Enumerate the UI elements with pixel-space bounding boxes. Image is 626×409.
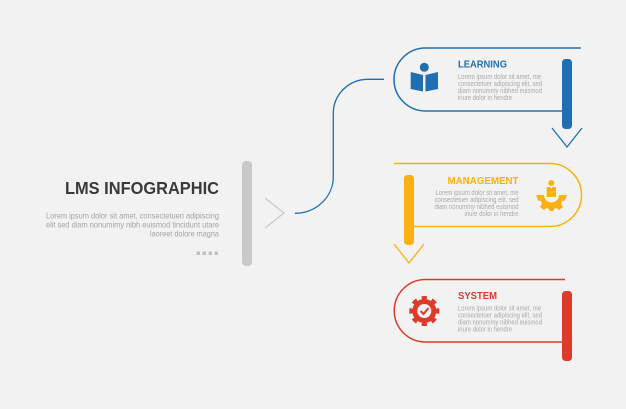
panel: intro (46, 178, 219, 255)
title: LMS INFOGRAPHIC (65, 178, 219, 198)
body text: diam nonummy nibhed euismod (434, 202, 518, 211)
icon: reader with book (411, 63, 438, 92)
body text: iriure dolor in hendre (458, 93, 512, 102)
intro text: elit sed diam nonumimy nibh euismod tincidunt utare (46, 220, 219, 230)
connector line (295, 79, 384, 213)
body text: iriure dolor in hendre (464, 209, 518, 218)
heading: LEARNING (458, 58, 507, 70)
arrow: down chevron (552, 128, 582, 147)
body text: Lorem ipsum dolor sit amet, me (436, 188, 518, 197)
pagination dots (196, 252, 218, 255)
heading: MANAGEMENT (448, 175, 519, 187)
grey vertical bar (242, 161, 252, 266)
body text (434, 188, 518, 218)
vertical bar (562, 291, 572, 361)
body text: Lorem ipsum dolor sit amet, me (458, 304, 541, 312)
body text (458, 72, 542, 102)
panel: learning (394, 48, 582, 147)
body text: diam nonummy nibhed euismod (458, 86, 542, 95)
arrow: grey chevron (265, 198, 284, 228)
intro text: laoreet dolore magna (150, 230, 219, 238)
intro text (46, 212, 219, 238)
arrow: down chevron (394, 244, 424, 263)
body text: consectetuer adipiscing elit, sed (458, 79, 542, 88)
icon: person on gear (536, 180, 567, 211)
body text: diam nonummy nibhed euismod (458, 318, 542, 326)
vertical bar (404, 175, 414, 245)
body text: consectetuer adipiscing elit, sed (458, 310, 542, 320)
heading: SYSTEM (458, 290, 497, 302)
card outline (394, 280, 565, 342)
intro text: Lorem ipsum dolor sit amet, consectetueri adipiscing (46, 212, 219, 220)
card outline (394, 164, 582, 226)
body text: Lorem ipsum dolor sit amet, me (458, 72, 541, 81)
card outline (394, 48, 581, 111)
vertical bar (562, 59, 572, 129)
panel: management (394, 164, 582, 263)
panel: system (394, 280, 572, 361)
body text (458, 304, 542, 334)
body text: iriure dolor in hendre (458, 324, 512, 334)
body text: consectetuer adipiscing elit, sed (434, 195, 518, 204)
icon: gear with check (412, 298, 437, 324)
